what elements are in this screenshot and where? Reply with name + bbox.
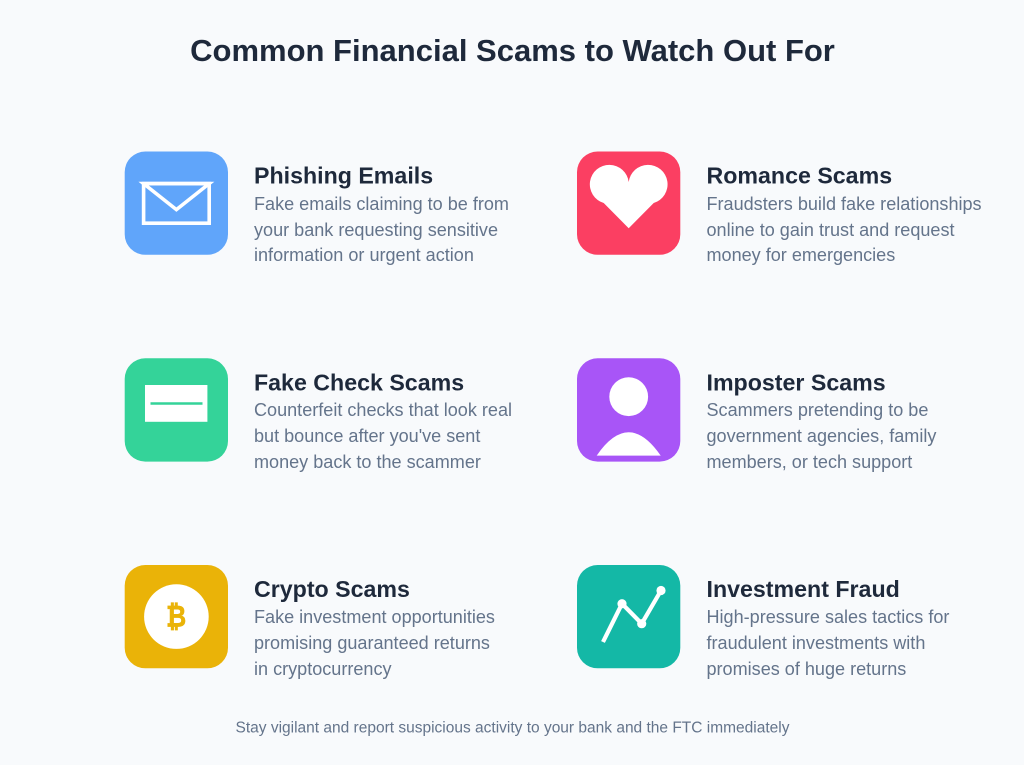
icon: envelope — [125, 152, 228, 255]
icon: line chart — [577, 565, 680, 668]
description: investment fraud: promises of huge returns — [706, 659, 906, 679]
icon: bitcoin coin: ₿ — [166, 599, 186, 633]
description: romance scams: online to gain trust and request — [706, 220, 955, 240]
panel: investment fraud — [577, 565, 949, 679]
description: crypto scams: promising guaranteed returns — [254, 633, 490, 653]
icon: check — [125, 358, 228, 462]
heading: investment fraud: Investment Fraud — [706, 576, 900, 602]
icon: bitcoin coin — [125, 565, 228, 668]
description: phishing emails: information or urgent action — [254, 245, 474, 265]
panel: phishing emails — [125, 152, 509, 265]
description: crypto scams: Fake investment opportunities — [254, 607, 495, 627]
panel: imposter scams — [577, 358, 936, 472]
description: fake check scams: Counterfeit checks that look real — [254, 400, 512, 420]
description: imposter scams: Scammers pretending to be — [706, 400, 928, 420]
footer note: Stay vigilant and report suspicious activity to your bank and the FTC immediately — [236, 720, 790, 736]
description: imposter scams: government agencies, family — [706, 426, 936, 446]
description: phishing emails: your bank requesting sensitive — [254, 220, 498, 240]
description: crypto scams: in cryptocurrency — [254, 659, 392, 679]
description: imposter scams: members, or tech support — [706, 452, 912, 472]
heading: phishing emails: Phishing Emails — [254, 162, 433, 188]
description: romance scams: Fraudsters build fake relationships — [706, 194, 982, 214]
title: Common Financial Scams to Watch Out For — [190, 33, 835, 68]
heading: imposter scams: Imposter Scams — [706, 370, 886, 396]
heading: fake check scams: Fake Check Scams — [254, 370, 464, 396]
panel: romance scams — [577, 152, 982, 265]
description: investment fraud: High-pressure sales tactics for — [706, 607, 949, 627]
heading: romance scams: Romance Scams — [706, 162, 892, 188]
description: romance scams: money for emergencies — [706, 245, 895, 265]
panel: fake check scams — [125, 358, 512, 472]
description: fake check scams: but bounce after you've sent — [254, 426, 480, 446]
description: fake check scams: money back to the scammer — [254, 452, 481, 472]
description: phishing emails: Fake emails claiming to be from — [254, 194, 509, 214]
icon: person — [577, 358, 680, 462]
icon: heart — [577, 152, 680, 255]
heading: crypto scams: Crypto Scams — [254, 576, 410, 602]
description: investment fraud: fraudulent investments with — [706, 633, 925, 653]
panel: crypto scams — [125, 565, 495, 679]
